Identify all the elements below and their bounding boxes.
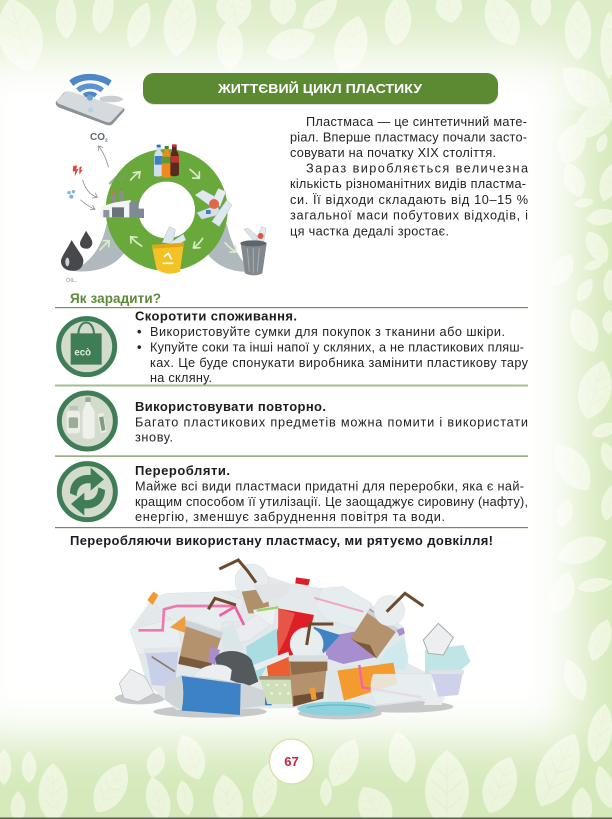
icon: yellow recycle bin [152, 227, 186, 274]
icon: factory [101, 175, 144, 218]
label: CO2: CO [90, 132, 105, 143]
intro paragraph: Пластмаса — це синтетичний мате- [306, 115, 527, 129]
panel: reduce consumption: Скоротити споживання. [135, 308, 297, 324]
icon: recycling arrows [59, 464, 115, 520]
crumpled plastic and cup, far right [423, 623, 471, 697]
plastic life cycle diagram [56, 74, 267, 284]
panel: reduce consumption: ках. Це буде спонукати виробника замінити пластикову тару [150, 356, 529, 370]
pile backing [130, 570, 432, 710]
brown cup, front [289, 624, 340, 707]
dark crumpled plastic [215, 651, 258, 687]
red bottle [272, 577, 317, 663]
clear cup with pink straw, top right [310, 587, 372, 630]
icon: eco bag: ecò [74, 348, 91, 359]
icon: crushed bottles [195, 188, 232, 227]
icon: reusable bottles [59, 393, 115, 449]
polka dot cup, left [143, 647, 181, 687]
page number: 67 [284, 754, 299, 769]
icon: plastic bottles [154, 144, 179, 178]
surgical mask [297, 702, 376, 716]
orange label and clear lid, centre [253, 652, 292, 678]
brown cup, left [178, 598, 236, 671]
green polka dot cup [259, 676, 296, 704]
panel: recycle: енергію, зменшує забруднення повітря та води. [135, 510, 445, 524]
icon: water drops [67, 190, 75, 199]
grey flows to oil and bin [70, 223, 255, 272]
intro paragraph: ця частка дедалі зростає. [290, 224, 449, 238]
illustration: pile of plastic waste [115, 560, 471, 719]
intro paragraph: совувати на початку XIX століття. [290, 146, 496, 160]
light blue bag [246, 628, 278, 681]
page number [270, 739, 314, 784]
panel: reduce consumption: Використовуйте сумки для покупок з тканини або шкіри. [150, 325, 505, 339]
panel: reuse: Використовувати повторно. [135, 399, 326, 414]
label: oil: OIL. [66, 278, 77, 284]
intro paragraph: ріал. Вперше пластмасу почали засто- [290, 130, 527, 144]
cup with straw, top centre [219, 560, 292, 625]
crumpled bag, left [119, 669, 154, 702]
orange cup with clear cup, right [327, 663, 447, 705]
intro paragraph: загальної маси побутових відходів, і [290, 208, 528, 222]
icon: phone and wifi [56, 74, 125, 125]
panel: reuse: знову. [135, 430, 173, 444]
clear cup contents, centre [215, 607, 270, 650]
subheading: Як зарадити? [70, 291, 161, 306]
panel: recycle: кращим способом її утилізації. Це заощаджує сировину (нафту), [135, 495, 528, 509]
panel: reduce consumption: • [137, 325, 142, 339]
process arrows [81, 146, 108, 210]
icon: oil drops [61, 231, 92, 271]
panel: reuse [55, 393, 528, 457]
blue bottle [165, 665, 272, 715]
icon: eco bag [59, 319, 115, 375]
purple bag [323, 630, 378, 664]
panel: reduce consumption: Купуйте соки та інші напої у скляних, а не пластикових пляш- [150, 340, 524, 354]
intro paragraph [290, 115, 529, 238]
icon: trash bin with bottles [240, 227, 267, 275]
title banner [143, 73, 498, 105]
panel: recycle: Переробляти. [135, 463, 230, 478]
title banner: ЖИТТЄВИЙ ЦИКЛ ПЛАСТИКУ [217, 81, 422, 96]
cycle arrows [100, 169, 236, 252]
green cycle ring [122, 165, 211, 255]
intro paragraph: кількість різноманітних видів пластма- [290, 177, 526, 191]
icon: energy sparks [73, 165, 83, 177]
panel: reuse: Багато пластикових предметів можна помити і використати [135, 416, 528, 430]
closing statement: Переробляючи використану пластмасу, ми рятуємо довкілля! [70, 533, 493, 548]
intro paragraph: си. Її відходи складають від 10–15 % [290, 193, 528, 207]
panel: reduce consumption: на скляну. [150, 371, 212, 385]
label: CO2: 2 [105, 138, 108, 144]
back clear bottle [130, 592, 243, 655]
brown cup, right [351, 593, 423, 670]
panel: recycle: Майже всі види пластмаси придатні для переробки, яка є най- [135, 480, 524, 494]
panel: reduce consumption [55, 307, 529, 386]
ground shadow [115, 692, 453, 719]
panel: recycle [55, 463, 528, 528]
panel: reduce consumption: • [137, 340, 142, 354]
intro paragraph: Зараз виробляється величезна [306, 162, 529, 176]
